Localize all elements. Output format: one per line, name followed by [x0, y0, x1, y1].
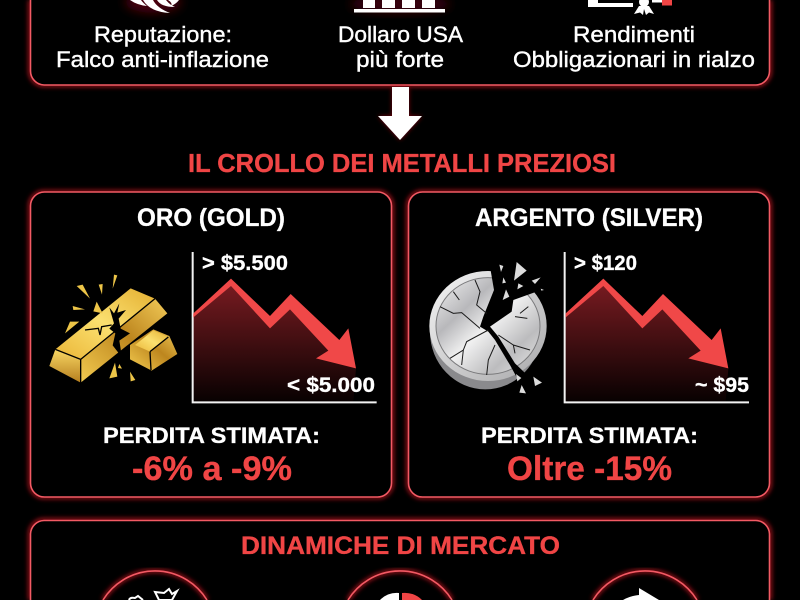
value: silver end price: ~ $95 — [695, 374, 749, 397]
label: reputation: Reputazione: — [94, 22, 232, 47]
chart: gold price — [193, 252, 377, 402]
heading: collapse of precious metals: IL CROLLO DEI METALLI PREZIOSI — [188, 150, 616, 178]
chart: silver price — [565, 252, 749, 402]
panel: cause — [30, 0, 770, 85]
icon: bank — [350, 0, 450, 13]
label: dollar: Dollaro USA — [338, 22, 463, 47]
icon: cracked silver coin — [429, 262, 553, 393]
label: gold estimated loss: PERDITA STIMATA: — [103, 423, 320, 448]
value: silver start price: > $120 — [574, 252, 637, 275]
icon circle: hands and money — [103, 571, 207, 600]
value: gold loss: -6% a -9% — [132, 450, 292, 488]
value: gold start price: > $5.500 — [202, 252, 288, 275]
arrow: cause to effect — [378, 87, 422, 140]
panel: market dynamics — [30, 520, 770, 600]
icon: cracked gold bars — [49, 275, 177, 383]
label: bond yields: Obbligazionari in rialzo — [513, 47, 755, 72]
label: reputation — [56, 22, 269, 72]
label: silver estimated loss: PERDITA STIMATA: — [481, 423, 698, 448]
panel title: gold: ORO (GOLD) — [137, 204, 285, 232]
value: silver loss: Oltre -15% — [507, 450, 672, 488]
icon: falcon — [125, 0, 181, 13]
label: dollar — [338, 22, 463, 72]
label: reputation: Falco anti-inflazione — [56, 47, 269, 72]
label: bond yields: Rendimenti — [573, 22, 695, 47]
label: bond yields — [513, 22, 755, 72]
label: dollar: più forte — [356, 47, 444, 72]
value: gold end price: < $5.000 — [287, 374, 375, 397]
icon circle: rebound arrow — [593, 571, 697, 600]
panel: silver — [408, 192, 770, 497]
icon circle: pie chart — [348, 571, 452, 600]
panel title: silver: ARGENTO (SILVER) — [475, 204, 703, 232]
heading: market dynamics: DINAMICHE DI MERCATO — [241, 532, 560, 560]
icon: bond certificate — [588, 0, 672, 15]
panel: gold — [30, 192, 392, 497]
